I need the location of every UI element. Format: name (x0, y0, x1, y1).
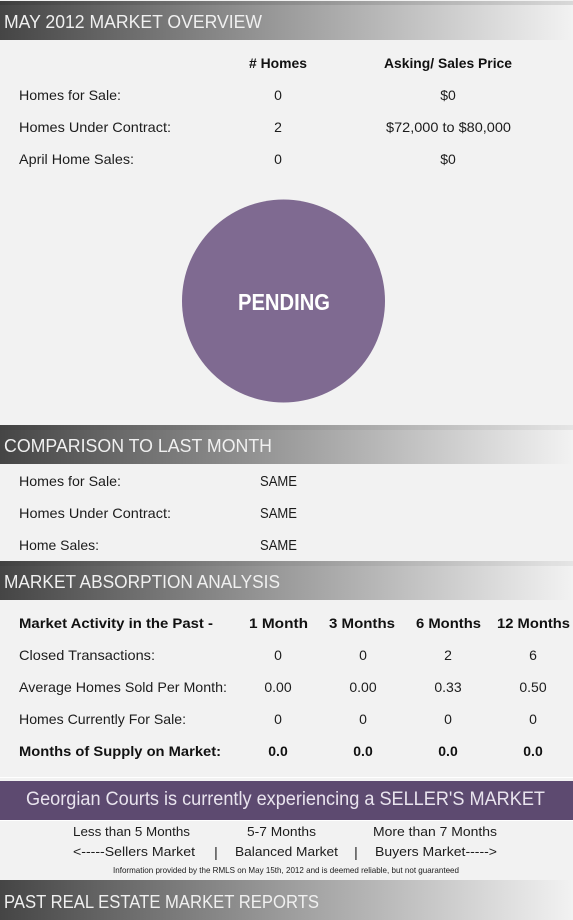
absorption table: 2 (444, 647, 452, 663)
overview table: $72,000 to $80,000 (386, 119, 511, 135)
absorption table: 0.0 (268, 743, 288, 759)
absorption table: 0 (359, 647, 367, 663)
legend: months of supply scale: <-----Sellers Market (73, 844, 195, 859)
heading: May 2012 market overview (0, 1, 573, 40)
legend: months of supply scale: Buyers Market-----> (375, 844, 497, 859)
overview table: Homes Under Contract: (19, 119, 171, 135)
absorption table: 0 (529, 711, 537, 727)
legend: months of supply scale: 5-7 Months (247, 824, 317, 839)
overview table (19, 55, 512, 167)
legend: months of supply scale: More than 7 Months (373, 824, 498, 839)
absorption table: 0 (274, 647, 282, 663)
absorption table: 3 Months (329, 615, 395, 631)
heading: May 2012 market overview: MAY 2012 MARKET OVERVIEW (4, 12, 262, 32)
panel: market overview (0, 1, 573, 402)
overview table: Asking/ Sales Price (384, 55, 512, 71)
absorption table: 12 Months (497, 615, 570, 631)
legend: months of supply scale (73, 824, 498, 860)
comparison table (19, 473, 297, 554)
absorption table: Closed Transactions: (19, 647, 155, 663)
absorption table: 0.00 (264, 679, 292, 695)
comparison table: Homes for Sale: (19, 473, 121, 489)
overview table: April Home Sales: (19, 151, 134, 167)
comparison table: SAME (260, 474, 297, 490)
legend: months of supply scale: | (354, 844, 358, 860)
absorption table: 0.00 (349, 679, 377, 695)
comparison table: Home Sales: (19, 537, 99, 553)
heading: market absorption analysis: MARKET ABSORPTION ANALYSIS (4, 572, 280, 592)
panel: comparison to last month (0, 425, 573, 554)
absorption table: 0.0 (353, 743, 373, 759)
absorption table: 0.0 (523, 743, 543, 759)
banner: seller's market: Georgian Courts is currently experiencing a SELLER'S MARKET (26, 789, 545, 810)
comparison table: Homes Under Contract: (19, 505, 171, 521)
overview table: $0 (440, 151, 456, 167)
status circle: pending (182, 200, 385, 402)
absorption table: 6 Months (416, 615, 481, 631)
absorption table: 0 (444, 711, 452, 727)
overview table: 0 (274, 87, 282, 103)
heading: past real estate market reports (0, 880, 573, 920)
legend: months of supply scale: Balanced Market (235, 844, 338, 859)
heading: comparison to last month (0, 425, 573, 464)
legend: months of supply scale: | (214, 844, 218, 860)
absorption table: 0 (359, 711, 367, 727)
absorption table: 0.0 (438, 743, 458, 759)
absorption table: 0.33 (434, 679, 462, 695)
overview table: # Homes (249, 55, 307, 71)
banner: seller's market (0, 777, 573, 821)
overview table: 0 (274, 151, 282, 167)
absorption table: 0.50 (519, 679, 547, 695)
absorption table (19, 615, 570, 759)
footnote: data source: Information provided by the RMLS on May 15th, 2012 and is deemed reliable, but not guaranteed (113, 865, 459, 875)
status circle: pending: PENDING (238, 289, 330, 315)
heading: past real estate market reports: PAST REAL ESTATE MARKET REPORTS (4, 892, 319, 912)
overview table: Homes for Sale: (19, 87, 121, 103)
absorption table: 6 (529, 647, 537, 663)
legend: months of supply scale: Less than 5 Months (73, 824, 191, 839)
absorption table: Average Homes Sold Per Month: (19, 679, 227, 695)
absorption table: Market Activity in the Past - (19, 615, 213, 631)
absorption table: 1 Month (249, 615, 308, 631)
absorption table: Homes Currently For Sale: (19, 711, 186, 727)
overview table: 2 (274, 119, 282, 135)
absorption table: Months of Supply on Market: (19, 743, 221, 759)
absorption table: 0 (274, 711, 282, 727)
heading: comparison to last month: COMPARISON TO LAST MONTH (4, 436, 272, 456)
comparison table: SAME (260, 506, 297, 522)
panel: market absorption analysis (0, 561, 573, 759)
overview table: $0 (440, 87, 456, 103)
comparison table: SAME (260, 538, 297, 554)
heading: market absorption analysis (0, 561, 573, 600)
